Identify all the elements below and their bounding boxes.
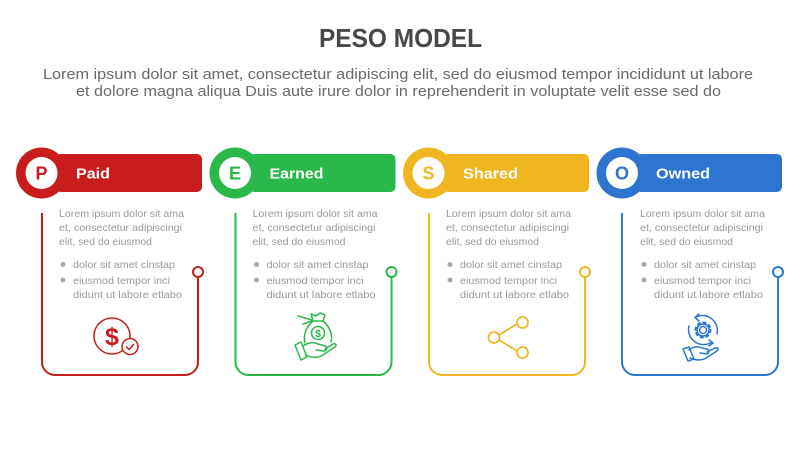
- connector dot: [386, 267, 396, 277]
- description: Lorem ipsum dolor sit ama: [59, 208, 184, 220]
- description: et, consectetur adipiscingi: [640, 222, 763, 234]
- icon: dollar with check: [94, 318, 138, 354]
- panel: Shared: [403, 148, 590, 375]
- letter badge: [596, 148, 648, 198]
- panel: Paid: [16, 148, 203, 375]
- letter badge: E: [229, 164, 241, 184]
- description: [640, 208, 765, 248]
- letter badge: [210, 148, 260, 198]
- outline frame: [429, 213, 585, 375]
- bullet list: didunt ut labore etlabo: [266, 289, 376, 301]
- letter badge: P: [35, 164, 48, 184]
- subtitle text: et dolore magna aliqua Duis aute irure dolor in reprehenderit in voluptate velit esse sed do: [76, 83, 721, 100]
- bullet list: [448, 259, 569, 301]
- description: Lorem ipsum dolor sit ama: [446, 208, 571, 220]
- bullet list: didunt ut labore etlabo: [460, 289, 569, 301]
- bullet list: eiusmod tempor inci: [73, 275, 170, 287]
- icon: share nodes: [488, 317, 528, 358]
- description: elit, sed do eiusmod: [59, 236, 152, 248]
- header bar: [250, 154, 396, 192]
- heading: Earned: [270, 166, 324, 182]
- description: Lorem ipsum dolor sit ama: [640, 208, 765, 220]
- subtitle text: Lorem ipsum dolor sit amet, consectetur adipiscing elit, sed do eiusmod tempor incididunt ut labore: [43, 66, 753, 83]
- description: Lorem ipsum dolor sit ama: [252, 208, 378, 220]
- heading: Owned: [656, 166, 710, 182]
- description: et, consectetur adipiscingi: [446, 222, 569, 234]
- description: [59, 208, 184, 248]
- letter badge: S: [422, 164, 435, 184]
- icon: money bag on hand: $: [315, 329, 321, 340]
- heading: Shared: [463, 166, 518, 182]
- description: [252, 208, 378, 248]
- header bar: [56, 154, 202, 192]
- description: elit, sed do eiusmod: [640, 236, 733, 248]
- icon: gear cycle on hand: [683, 314, 718, 361]
- bullet list: dolor sit amet cinstap: [460, 259, 562, 271]
- header bar: [636, 154, 782, 192]
- outline frame: [236, 213, 392, 375]
- bullet list: dolor sit amet cinstap: [266, 259, 369, 271]
- heading: Paid: [76, 166, 110, 182]
- panel: Earned: [210, 148, 396, 375]
- bullet list: [60, 259, 182, 301]
- bullet list: dolor sit amet cinstap: [654, 259, 756, 271]
- icon: money bag on hand: [295, 313, 336, 360]
- header bar: [443, 154, 589, 192]
- description: [446, 208, 571, 248]
- letter badge: [403, 148, 454, 198]
- bullet list: [642, 259, 763, 301]
- bullet list: dolor sit amet cinstap: [73, 259, 175, 271]
- description: et, consectetur adipiscingi: [252, 222, 376, 234]
- title: PESO MODEL: [319, 23, 482, 53]
- letter badge: O: [615, 164, 629, 184]
- description: elit, sed do eiusmod: [446, 236, 539, 248]
- bullet list: didunt ut labore etlabo: [73, 289, 182, 301]
- bullet list: didunt ut labore etlabo: [654, 289, 763, 301]
- description: elit, sed do eiusmod: [252, 236, 346, 248]
- connector dot: [193, 267, 203, 277]
- outline frame: [42, 213, 198, 375]
- outline frame: [622, 213, 778, 375]
- connector dot: [773, 267, 783, 277]
- icon: dollar with check: $: [105, 323, 119, 351]
- bullet list: eiusmod tempor inci: [266, 275, 364, 287]
- connector dot: [580, 267, 590, 277]
- subtitle text: [43, 66, 753, 100]
- bullet list: eiusmod tempor inci: [460, 275, 557, 287]
- description: et, consectetur adipiscingi: [59, 222, 182, 234]
- letter badge: [16, 148, 67, 198]
- bullet list: eiusmod tempor inci: [654, 275, 751, 287]
- panel: Owned: [596, 148, 783, 375]
- bullet list: [254, 259, 376, 301]
